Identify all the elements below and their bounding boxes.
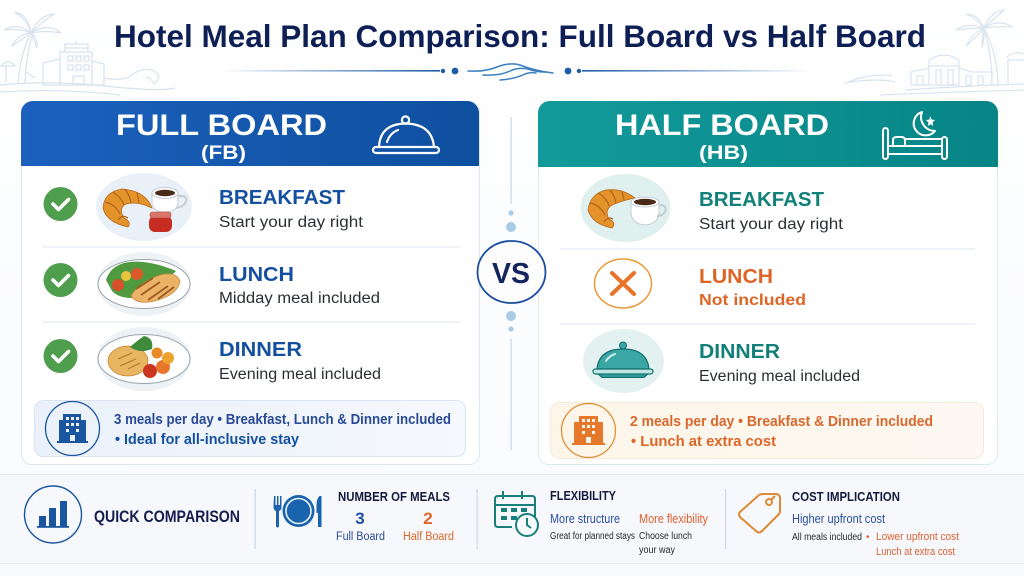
block: cost implication: Lower upfront cost: [876, 531, 959, 543]
icon: breakfast plate: [580, 174, 670, 242]
icon: not included: [594, 259, 652, 308]
block: cost implication: Higher upfront cost: [792, 512, 885, 526]
header: full board: FULL BOARD: [116, 109, 327, 142]
block: number of meals: [336, 490, 454, 543]
decoration: right palm and hotel: [844, 10, 1024, 95]
text: full board summary: 3 meals per day • Breakfast, Lunch & Dinner included: [114, 412, 451, 428]
icon: lunch plate: [97, 252, 191, 316]
text: breakfast note: Start your day right: [699, 216, 844, 233]
panel: quick comparison band: [0, 474, 1024, 564]
text: half board summary: [630, 414, 933, 450]
title ornament: [222, 64, 810, 80]
text: full board summary: • Ideal for all-inclusive stay: [115, 432, 299, 448]
text: dinner note: Evening meal included: [699, 368, 860, 385]
row: lunch: [44, 252, 380, 316]
header: half board: (HB): [699, 143, 748, 164]
icon: calendar: [495, 491, 538, 536]
icon: check: [44, 187, 78, 221]
block: number of meals: 3: [355, 509, 365, 528]
header: half board: HALF BOARD: [615, 109, 829, 142]
panel: half board: [538, 101, 998, 464]
block: flexibility: More structure: [550, 512, 620, 526]
block: number of meals: 2: [423, 509, 433, 528]
text: half board summary: • Lunch at extra cost: [631, 434, 776, 450]
block: cost implication: Lunch at extra cost: [876, 546, 955, 558]
text: full board summary: [114, 412, 451, 448]
text: breakfast note: Start your day right: [219, 214, 364, 231]
icon: dinner plate: [97, 327, 191, 391]
icon: hotel: [562, 404, 616, 458]
panel: full board: [21, 101, 480, 464]
block: cost implication: COST IMPLICATION: [792, 490, 900, 504]
block: flexibility: FLEXIBILITY: [550, 489, 617, 503]
decoration: left palm, hotel and wave: [0, 12, 175, 95]
header: full board: (FB): [201, 143, 246, 164]
row: dinner: [44, 327, 381, 391]
text: lunch note: Midday meal included: [219, 290, 380, 307]
block: number of meals: Full Board: [336, 531, 385, 543]
label: lunch: LUNCH: [219, 264, 294, 286]
block: flexibility: your way: [639, 545, 675, 556]
vs separator: [478, 117, 546, 450]
header: full board: [21, 101, 479, 166]
block: number of meals: NUMBER OF MEALS: [338, 490, 450, 504]
icon: breakfast plate: [96, 173, 192, 241]
icon: check: [44, 339, 78, 373]
block: cost implication: All meals included: [792, 532, 862, 543]
block: flexibility: More flexibility: [639, 512, 709, 526]
label: dinner: DINNER: [219, 339, 303, 361]
row: dinner: [583, 329, 860, 393]
label: lunch: LUNCH: [699, 266, 773, 288]
vs separator: VS: [492, 258, 530, 290]
text: dinner note: Evening meal included: [219, 366, 381, 383]
callout: half board summary: [550, 402, 984, 458]
icon: teal cloche: [583, 329, 664, 393]
row: breakfast: [44, 173, 364, 241]
block: flexibility: Great for planned stays: [550, 531, 635, 542]
icon: price tag: [739, 494, 780, 532]
heading: quick comparison: QUICK COMPARISON: [94, 507, 240, 526]
text: half board summary: 2 meals per day • Breakfast & Dinner included: [630, 414, 933, 430]
block: flexibility: Choose lunch: [639, 531, 692, 542]
icon: hotel: [46, 402, 100, 456]
block: number of meals: Half Board: [403, 531, 454, 543]
block: flexibility: [550, 489, 709, 556]
header: half board: [538, 101, 998, 167]
icon: cloche outline: [373, 116, 439, 153]
text: lunch note: Not included: [699, 292, 806, 309]
icon: check: [44, 263, 78, 297]
icon: plate and cutlery: [274, 495, 322, 528]
icon: bed and moon: [883, 112, 947, 159]
icon: bar chart: [24, 486, 82, 543]
label: dinner: DINNER: [699, 341, 781, 363]
row: lunch: [594, 259, 806, 309]
label: breakfast: BREAKFAST: [699, 189, 824, 211]
block: cost implication: [792, 490, 959, 558]
callout: full board summary: [34, 400, 466, 456]
block: cost implication: •: [866, 532, 870, 543]
title: Hotel Meal Plan Comparison: Full Board vs Half Board: [114, 18, 926, 54]
row: breakfast: [580, 174, 844, 242]
label: breakfast: BREAKFAST: [219, 187, 345, 209]
